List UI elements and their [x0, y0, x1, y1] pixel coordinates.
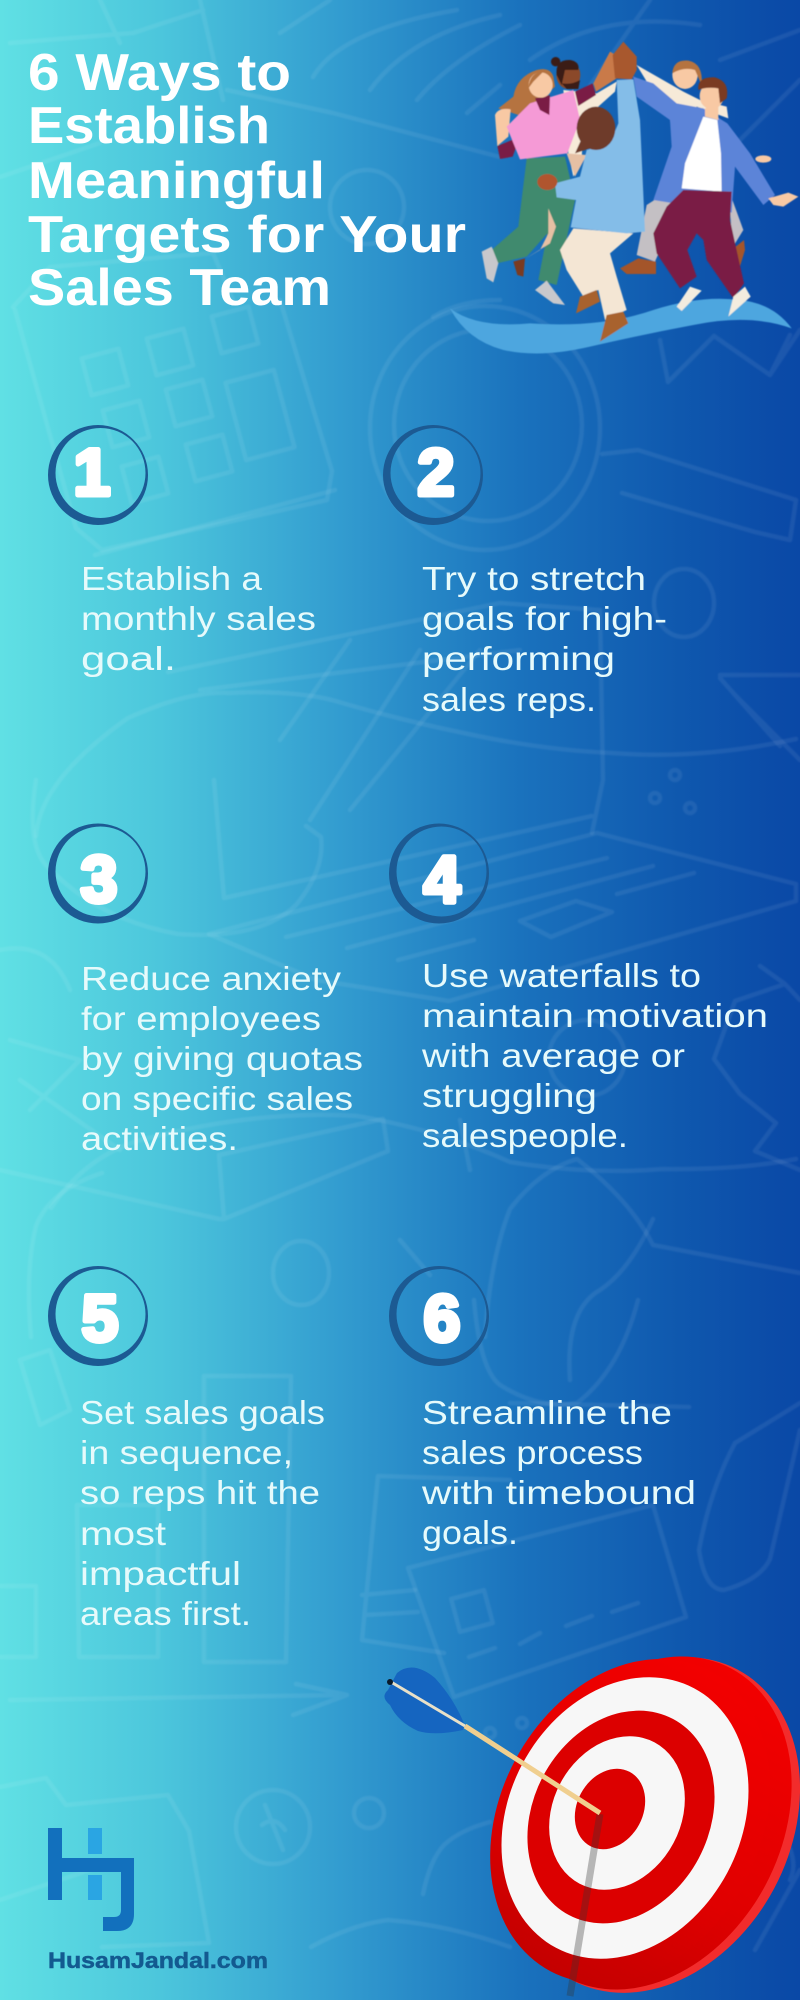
title: Meaningful — [28, 152, 325, 210]
text 5: areas first. — [80, 1595, 251, 1632]
wave — [450, 299, 792, 353]
target with arrow — [384, 1606, 800, 2000]
illustration: team high five — [450, 42, 798, 353]
step 5 — [48, 1266, 325, 1632]
badge 5: 5 — [82, 1281, 118, 1355]
text 2: sales reps. — [422, 681, 596, 718]
step 3 — [48, 823, 363, 1157]
text 3: by giving quotas — [81, 1040, 363, 1077]
text 5: most — [80, 1515, 166, 1552]
step 6 — [389, 1266, 696, 1551]
text 3: for employees — [81, 1000, 321, 1037]
text 5: impactful — [80, 1555, 241, 1592]
target rim — [450, 1607, 800, 2000]
text 5: so reps hit the — [80, 1474, 320, 1511]
text 4: maintain motivation — [422, 997, 768, 1034]
arrow shaft — [387, 1679, 600, 1813]
text 3: activities. — [81, 1120, 238, 1157]
bullseye — [561, 1756, 659, 1862]
title — [28, 44, 466, 317]
text 4 — [421, 957, 768, 1154]
text 2: goals for high- — [422, 600, 667, 637]
target side — [453, 1606, 800, 2000]
badge 3 — [48, 823, 148, 923]
text 4: Use waterfalls to — [422, 957, 701, 994]
text 6: with timebound — [421, 1474, 696, 1511]
text 5: Set sales goals — [80, 1394, 325, 1431]
badge 5 — [48, 1266, 148, 1366]
man with bun — [551, 57, 617, 177]
text 1: Establish a — [81, 560, 263, 597]
logo mark — [48, 1828, 134, 1931]
badge 2: 2 — [418, 435, 454, 509]
badge 4 — [389, 823, 489, 923]
text 6: sales process — [422, 1434, 643, 1471]
logo — [48, 1828, 268, 1973]
target stand — [570, 1814, 600, 1996]
badge 6 — [389, 1266, 489, 1366]
joined hands — [613, 42, 637, 79]
text 5: in sequence, — [80, 1434, 293, 1471]
badge 6: 6 — [424, 1281, 460, 1355]
badge 2 — [383, 425, 483, 525]
badge 4: 4 — [424, 842, 461, 916]
step 4 — [389, 823, 768, 1154]
text 2: performing — [422, 640, 615, 677]
text 3 — [81, 960, 363, 1157]
title: Sales Team — [28, 259, 331, 317]
text 1: goal. — [81, 640, 176, 677]
text 2: Try to stretch — [422, 560, 646, 597]
back person — [620, 61, 745, 274]
text 3: on specific sales — [81, 1080, 353, 1117]
text 4: with average or — [421, 1037, 685, 1074]
badge 1: 1 — [74, 435, 110, 509]
target face — [435, 1610, 800, 2000]
red ring — [491, 1678, 751, 1956]
text 5 — [80, 1394, 325, 1632]
badge 1 — [48, 425, 148, 525]
logo wordmark: HusamJandal.com — [48, 1948, 268, 1973]
text 4: struggling — [422, 1077, 597, 1114]
front man with blue jacket — [633, 77, 798, 317]
text 6: Streamline the — [422, 1394, 672, 1431]
title: Targets for Your — [28, 206, 466, 264]
outer white ring — [454, 1634, 796, 2000]
pink shirt woman — [482, 52, 618, 305]
title: Establish — [28, 97, 270, 155]
badge 3: 3 — [81, 842, 117, 916]
text 6 — [421, 1394, 696, 1551]
step 1 — [48, 425, 316, 677]
text 4: salespeople. — [422, 1117, 628, 1154]
text 1: monthly sales — [81, 600, 316, 637]
text 1 — [81, 560, 316, 677]
text 2 — [422, 560, 667, 718]
text 6: goals. — [422, 1514, 518, 1551]
inner white ring — [523, 1712, 711, 1914]
step 2 — [383, 425, 667, 718]
arrow fletching — [384, 1668, 465, 1733]
text 3: Reduce anxiety — [81, 960, 342, 997]
blue coat woman — [537, 79, 645, 342]
title: 6 Ways to — [28, 44, 291, 102]
